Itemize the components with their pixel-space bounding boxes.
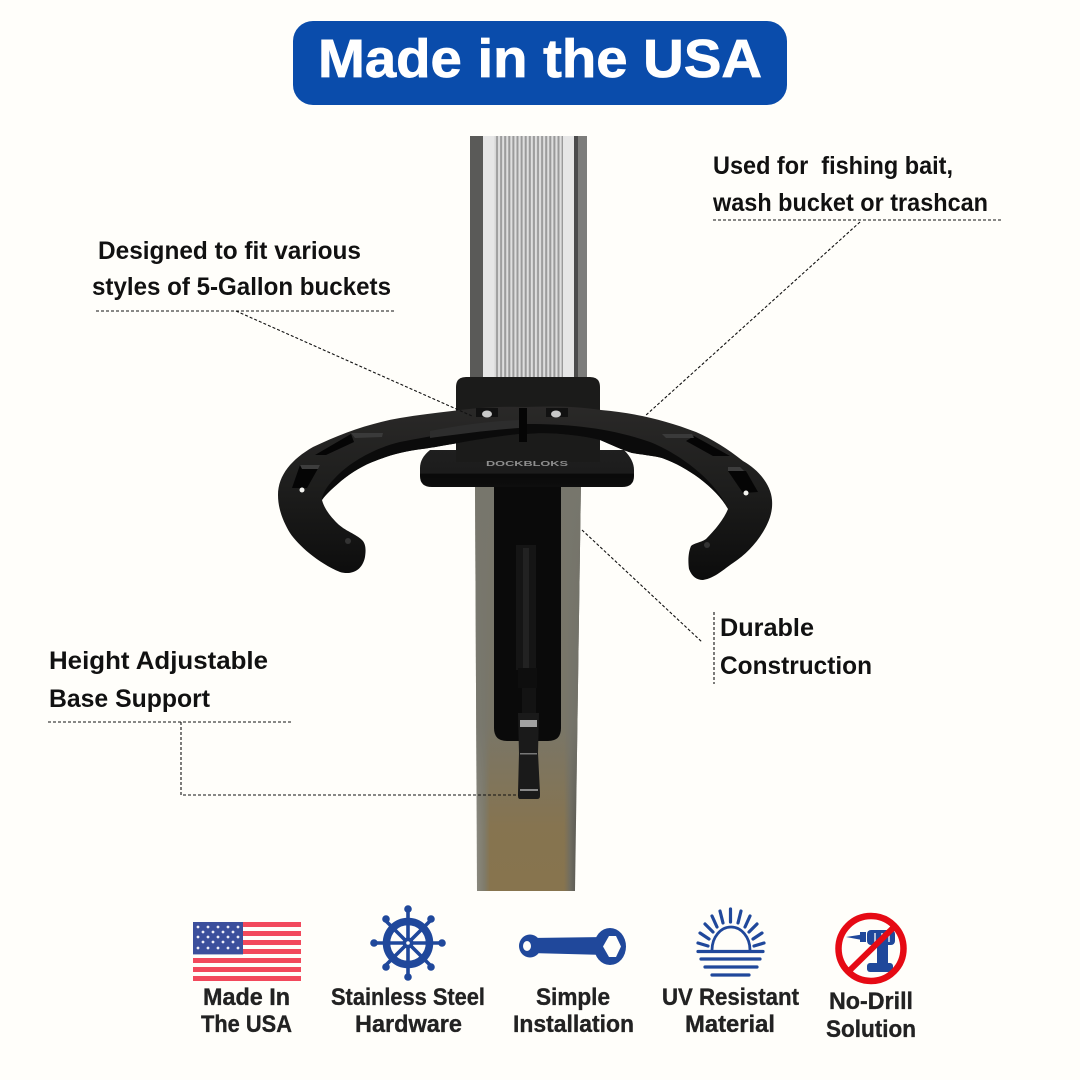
icon: wrench <box>519 928 626 965</box>
black slide plate <box>494 480 561 741</box>
callout: fishing bait use: Used for fishing bait, <box>713 152 953 180</box>
feature: stainless steel hardware: Stainless Steel <box>331 984 485 1011</box>
feature: no-drill solution: Solution <box>826 1016 916 1043</box>
feature: UV resistant material: Material <box>685 1011 775 1038</box>
feature: simple installation <box>513 928 634 1038</box>
feature: no-drill solution <box>826 916 916 1043</box>
ring screws <box>345 538 351 544</box>
feature: simple installation: Installation <box>513 1011 634 1038</box>
bracket bolts <box>476 408 568 418</box>
icon: crossed-out drill <box>838 916 904 981</box>
feature: UV resistant material <box>662 909 799 1038</box>
feature: stainless steel hardware <box>331 905 485 1038</box>
upper aluminium tube <box>470 136 587 382</box>
lower mounting plate <box>420 450 634 487</box>
feature: made in the USA: Made In <box>203 984 290 1011</box>
callout: fishing bait use <box>645 152 1003 416</box>
adjustment slot <box>516 545 537 714</box>
callout: height adjustable: Base Support <box>49 685 211 713</box>
callout: durable construction: Construction <box>720 652 872 680</box>
icon: sun over water <box>698 909 764 975</box>
callout: height adjustable: Height Adjustable <box>49 647 268 675</box>
feature: made in the USA <box>193 922 301 1038</box>
icon: ship wheel <box>370 905 446 981</box>
icon: american flag <box>193 922 301 982</box>
callout: bucket fit <box>92 237 472 416</box>
feature: UV resistant material: UV Resistant <box>662 984 799 1011</box>
ring centre notch <box>519 408 527 442</box>
callout: durable construction: Durable <box>720 614 814 642</box>
ring slots <box>315 434 354 455</box>
brand mark: DOCKBLOKS <box>486 461 569 468</box>
height adjust handle <box>518 713 540 799</box>
feature: stainless steel hardware: Hardware <box>355 1011 462 1038</box>
title banner: Made in the USA <box>318 29 762 89</box>
feature: made in the USA: The USA <box>201 1011 292 1038</box>
lower tube <box>475 480 581 891</box>
feature: simple installation: Simple <box>536 984 610 1011</box>
title banner <box>293 21 787 105</box>
callout: bucket fit: Designed to fit various <box>98 237 361 265</box>
callout: durable construction <box>582 530 872 684</box>
ring inner wall <box>322 424 519 500</box>
feature: no-drill solution: No-Drill <box>829 988 913 1015</box>
callout: bucket fit: styles of 5-Gallon buckets <box>92 273 391 301</box>
callout: fishing bait use: wash bucket or trashcan <box>712 189 988 217</box>
ring holder <box>278 406 772 580</box>
product: post and bucket holder <box>278 136 772 891</box>
upper clamp plate <box>456 377 600 462</box>
callout: height adjustable <box>48 647 519 795</box>
